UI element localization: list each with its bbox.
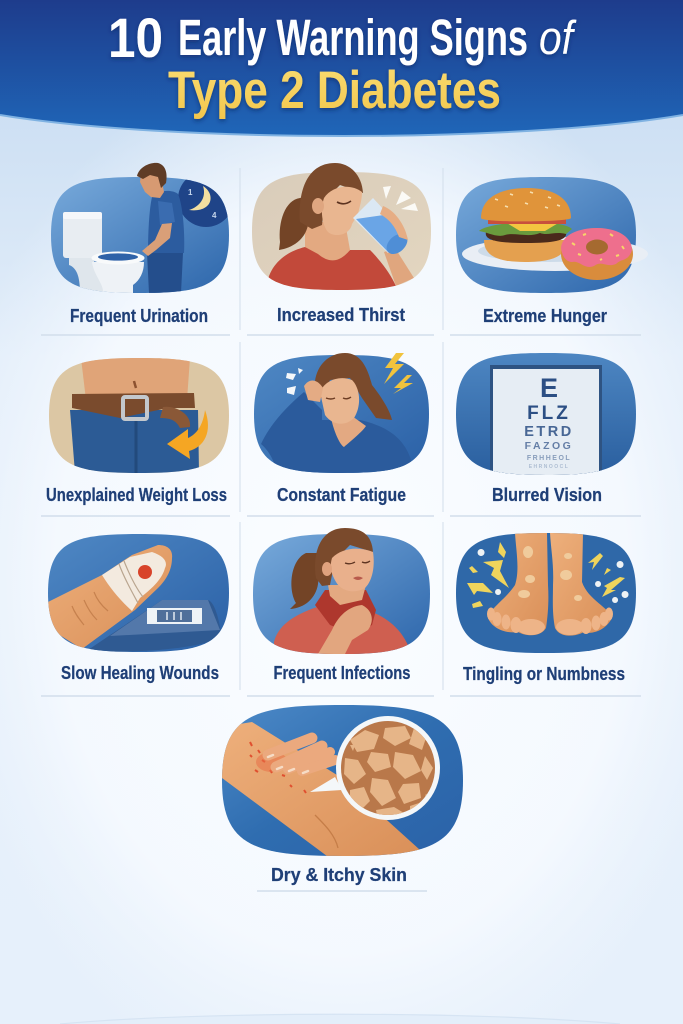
panel: frequent urination [51, 163, 234, 326]
icon: loose belt and arrow [49, 358, 229, 473]
label: Unexplained Weight Loss [46, 484, 227, 505]
icon: tired woman with lightning [254, 353, 429, 473]
title: Type 2 Diabetes [168, 61, 501, 120]
title: 10 [108, 6, 163, 69]
panel: blurred vision [456, 353, 636, 505]
panel: unexplained weight loss [46, 358, 229, 505]
panel: constant fatigue [254, 353, 429, 505]
icon: man at toilet at night: 1 [188, 188, 193, 197]
icon: bandaged finger and glucose meter [40, 534, 229, 652]
label: Frequent Urination [70, 305, 208, 326]
title: of [539, 11, 577, 64]
label: Extreme Hunger [483, 305, 607, 326]
panel: increased thirst [252, 163, 431, 325]
icon: eye chart: FRHHEOL [527, 455, 571, 462]
icon: burger and donut [456, 177, 648, 293]
icon: eye chart: FLZ [527, 403, 571, 424]
panel: extreme hunger [456, 177, 648, 326]
icon: woman drinking water [252, 163, 431, 292]
icon: arm with magnified cracked skin [215, 705, 463, 862]
icon: woman holding sore throat [253, 528, 430, 654]
icon: eye chart: EHRNOOCL [529, 464, 569, 470]
label: Slow Healing Wounds [61, 662, 219, 683]
grid dividers [41, 168, 641, 891]
title: Early Warning Signs [178, 9, 528, 66]
panel: slow healing wounds [40, 534, 229, 683]
label: Tingling or Numbness [463, 663, 625, 684]
header banner [0, 0, 683, 136]
icon: eye chart: ETRD [524, 424, 574, 440]
panel: tingling or numbness [456, 533, 636, 684]
panel: dry and itchy skin [215, 705, 463, 885]
icon: man at toilet at night: 4 [212, 211, 217, 220]
label: Frequent Infections [274, 662, 410, 683]
label: Constant Fatigue [277, 484, 406, 505]
icon: feet with lightning bolts [456, 533, 636, 653]
icon: eye chart: FAZOG [525, 440, 573, 452]
icon: eye chart [456, 353, 636, 480]
icon: man at toilet at night [51, 163, 234, 293]
label: Increased Thirst [277, 304, 405, 325]
icon: eye chart: E [540, 373, 558, 403]
title [108, 6, 577, 120]
label: Blurred Vision [492, 484, 602, 505]
panel: frequent infections [253, 528, 430, 683]
label: Dry & Itchy Skin [271, 864, 407, 885]
